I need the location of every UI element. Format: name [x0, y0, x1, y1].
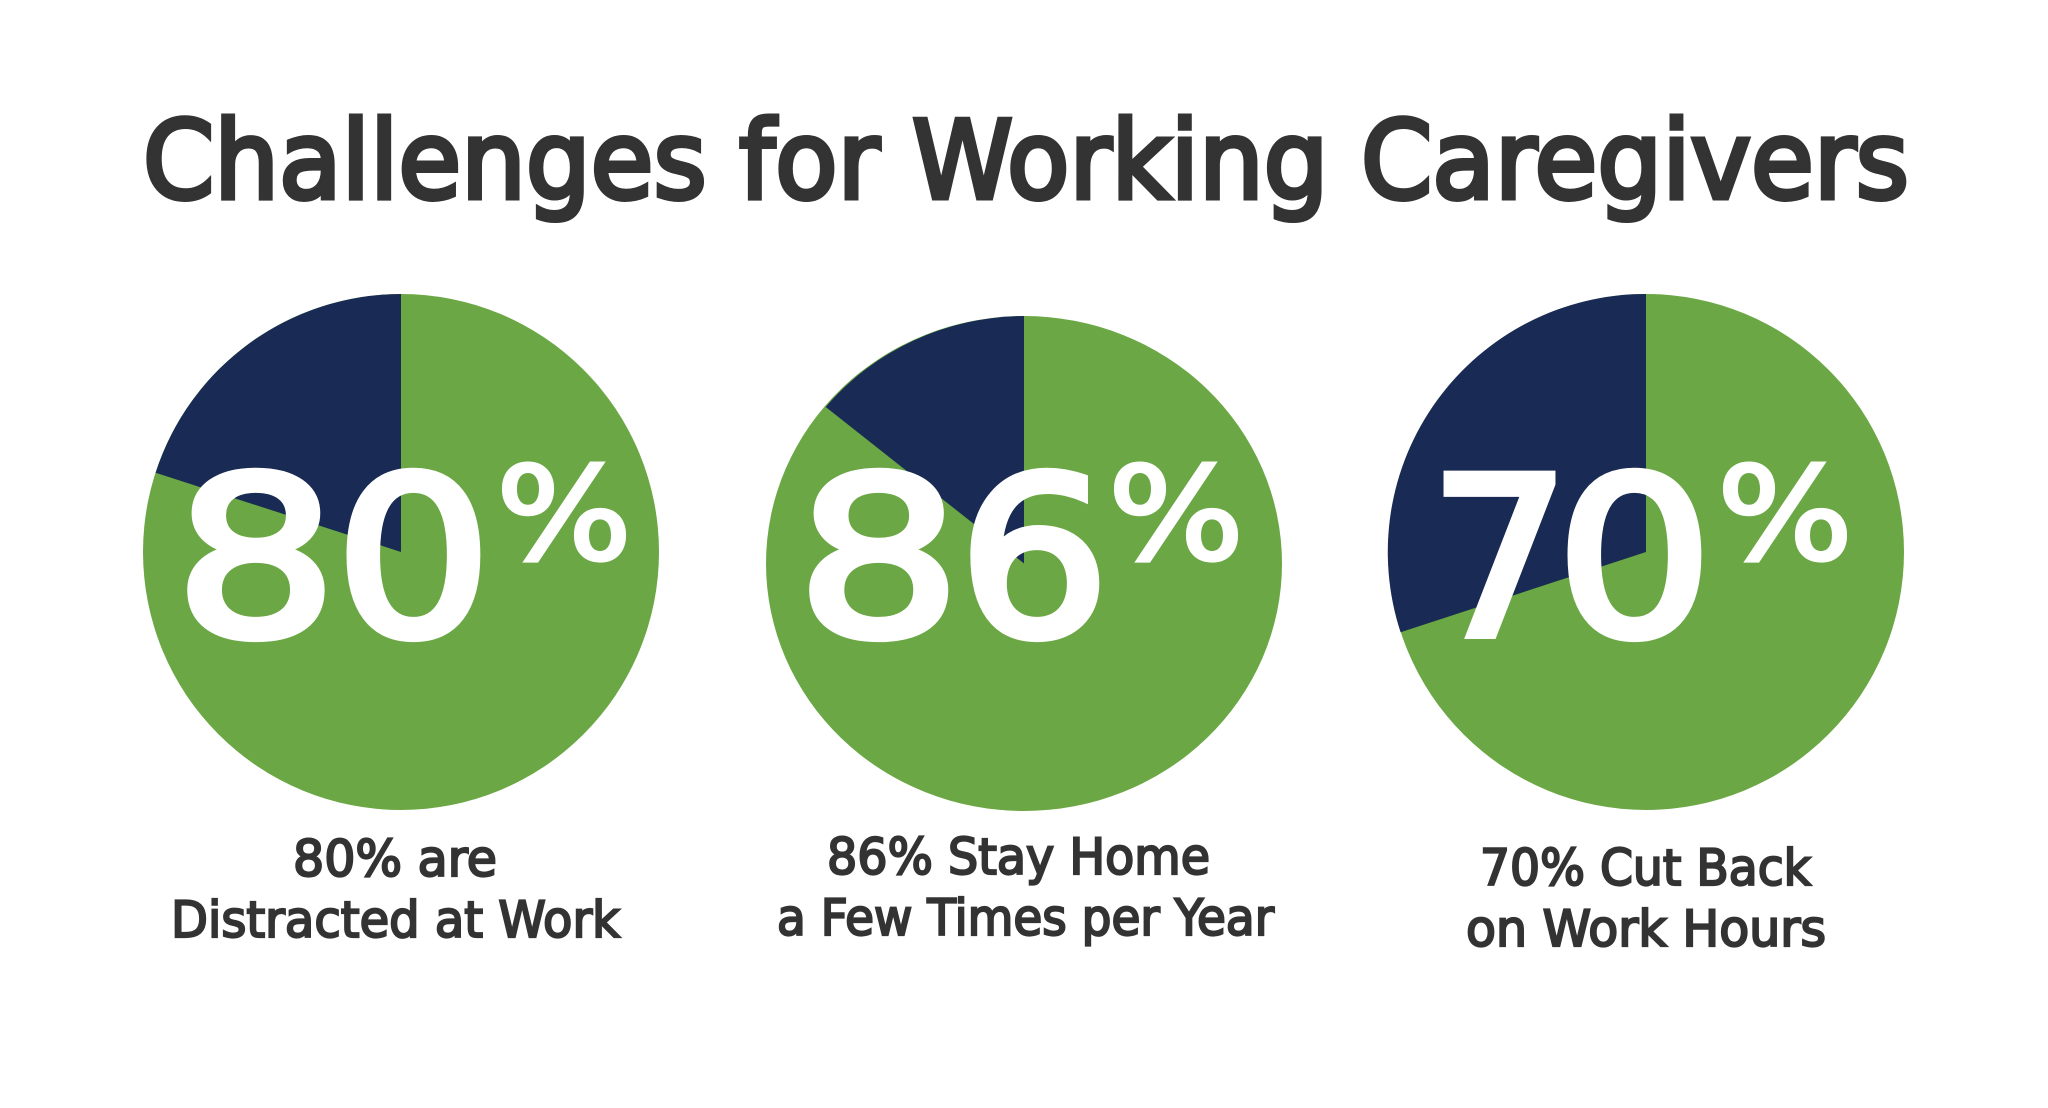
pie chart: 80% — [143, 294, 659, 810]
caption: 86% Stay Home a Few Times per Year: a Few Times per Year — [777, 889, 1275, 947]
caption: 80% are Distracted at Work: 80% are — [293, 830, 497, 888]
big number: 70: 7 — [1429, 431, 1570, 687]
percent sign: % — [496, 440, 632, 590]
caption: 70% Cut Back on Work Hours: 70% Cut Back — [1480, 839, 1811, 897]
caption: 80% are Distracted at Work — [171, 830, 620, 949]
big number: 70 — [1429, 431, 1713, 687]
big number: 80: 8 — [174, 431, 338, 687]
big number: 80: 0 — [335, 431, 492, 687]
pie chart: 70% — [1388, 294, 1904, 810]
caption: 70% Cut Back on Work Hours: on Work Hours — [1466, 900, 1826, 958]
title: Challenges for Working Caregivers — [143, 99, 1909, 224]
big number: 86: 8 — [796, 431, 961, 687]
big number: 80 — [174, 431, 492, 687]
panel: 70% cut back — [1388, 294, 1904, 958]
percent sign: % — [1108, 440, 1244, 590]
caption: 86% Stay Home a Few Times per Year — [777, 828, 1275, 947]
caption: 86% Stay Home a Few Times per Year: 86% Stay Home — [827, 828, 1210, 886]
pie chart: 86% — [766, 316, 1282, 811]
panel: 80% distracted at work — [143, 294, 659, 949]
caption: 80% are Distracted at Work: Distracted at Work — [171, 891, 620, 949]
big number: 86 — [796, 431, 1110, 687]
percent sign: % — [1717, 440, 1853, 590]
big number: 86: 6 — [958, 431, 1110, 687]
caption: 70% Cut Back on Work Hours — [1466, 839, 1826, 958]
panel: 86% stay home — [766, 316, 1282, 947]
big number: 70: 0 — [1556, 431, 1713, 687]
